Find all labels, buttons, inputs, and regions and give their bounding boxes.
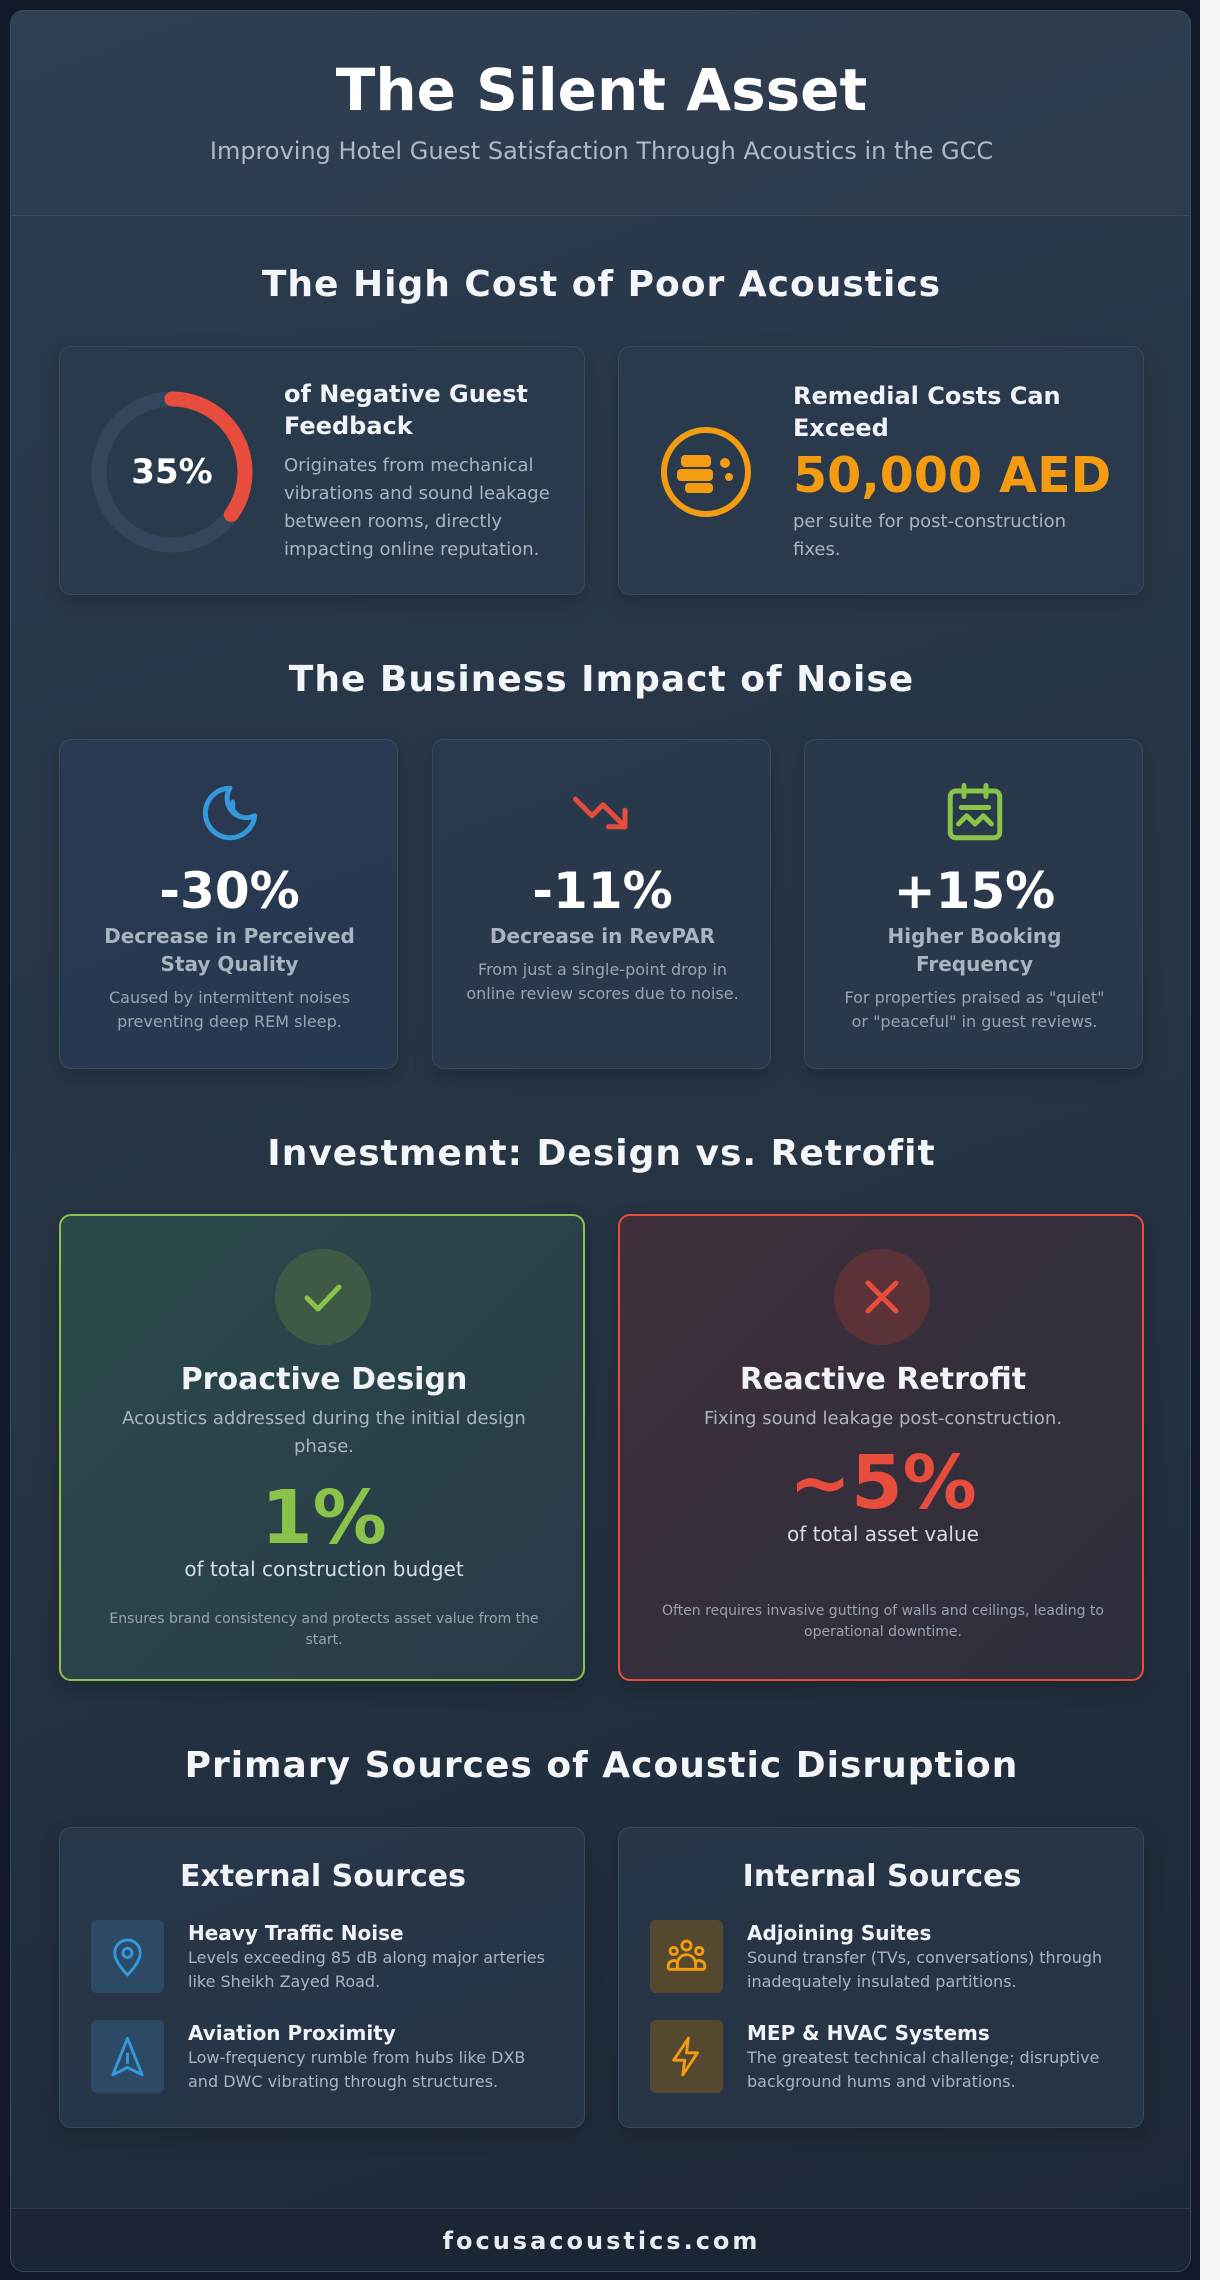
item: heavy traffic: Levels exceeding 85 dB along major arteries like Sheikh Zayed Road. (188, 1948, 545, 1991)
text: Remedial Costs Can Exceed (793, 382, 1061, 442)
title: The Silent Asset (336, 56, 867, 124)
card: booking frequency: Frequency (916, 952, 1033, 976)
card: proactive design: Ensures brand consistency and protects asset value from the start. (109, 1611, 539, 1648)
card: perceived quality: -30% (159, 862, 300, 920)
card: booking frequency: +15% (894, 862, 1055, 920)
text: Originates from mechanical vibrations and sound leakage between rooms, directly impacting online reputation. (284, 455, 550, 560)
item: adjoining suites: Sound transfer (TVs, conversations) through inadequately insulated partitions. (747, 1948, 1102, 1991)
text: per suite for post-construction fixes. (793, 511, 1066, 560)
card: external sources (59, 1827, 585, 2128)
card: booking frequency: For properties praised as "quiet" (844, 988, 1105, 1007)
item: adjoining suites: Adjoining Suites (747, 1921, 931, 1945)
card: perceived quality (59, 739, 398, 1069)
subtitle: Improving Hotel Guest Satisfaction Through Acoustics in the GCC (210, 137, 993, 165)
footer (11, 2208, 1192, 2273)
card title: Internal Sources (743, 1859, 1021, 1894)
item: heavy traffic: Heavy Traffic Noise (188, 1921, 404, 1945)
item: mep hvac: MEP & HVAC Systems (747, 2021, 990, 2045)
card: revpar: Decrease in RevPAR (490, 924, 715, 948)
icon: navigation (91, 2020, 164, 2093)
card: perceived quality: Decrease in Perceived (104, 924, 355, 948)
icon: calendar (948, 783, 1002, 840)
heading: investment: Investment: Design vs. Retrofit (267, 1133, 936, 1174)
card: booking frequency: or "peaceful" in guest reviews. (852, 1012, 1097, 1031)
icon: people (650, 1920, 723, 1993)
icon: cross (834, 1249, 930, 1345)
card: revpar: From just a single-point drop in (478, 960, 727, 979)
text: of Negative Guest Feedback (284, 380, 528, 440)
card: booking frequency: Higher Booking (888, 924, 1061, 948)
card: remedial costs (618, 346, 1144, 595)
icon: map pin (91, 1920, 164, 1993)
card title: External Sources (180, 1859, 466, 1894)
card: proactive design: 1% (261, 1475, 387, 1561)
card: reactive retrofit: ~5% (789, 1440, 977, 1526)
card: revpar: online review scores due to noise. (466, 984, 739, 1003)
item: heavy traffic (91, 1920, 545, 1993)
icon: check (275, 1249, 371, 1345)
text (284, 380, 550, 560)
card: proactive design: Acoustics addressed during the initial design phase. (122, 1408, 526, 1457)
card: reactive retrofit: Reactive Retrofit (740, 1362, 1026, 1397)
item: adjoining suites (650, 1920, 1102, 1993)
text: 50,000 AED (793, 447, 1111, 504)
icon: coin (661, 427, 751, 517)
card: reactive retrofit (618, 1214, 1144, 1681)
card: proactive design: Proactive Design (181, 1362, 467, 1397)
heading: primary sources: Primary Sources of Acoustic Disruption (185, 1745, 1018, 1786)
card: reactive retrofit: of total asset value (787, 1522, 979, 1546)
card: perceived quality: Caused by intermittent noises (109, 988, 350, 1007)
card: booking frequency (804, 739, 1143, 1069)
card: revpar (432, 739, 771, 1069)
text (793, 382, 1111, 560)
card: reactive retrofit: Often requires invasive gutting of walls and ceilings, leading to operational downtime. (662, 1603, 1104, 1640)
item: aviation: Aviation Proximity (188, 2021, 396, 2045)
item: mep hvac: The greatest technical challenge; disruptive background hums and vibrations. (747, 2048, 1099, 2091)
icon: moon (202, 786, 258, 840)
footer text: focusacoustics.com (443, 2227, 760, 2255)
donut chart (92, 392, 252, 552)
icon: trend down (573, 796, 628, 830)
card: proactive design: of total construction budget (184, 1557, 464, 1581)
card: internal sources (618, 1827, 1144, 2128)
card: revpar: -11% (532, 862, 673, 920)
card: reactive retrofit: Fixing sound leakage post-construction. (704, 1408, 1062, 1429)
item: aviation (91, 2020, 525, 2093)
item: aviation: Low-frequency rumble from hubs like DXB and DWC vibrating through structures. (188, 2048, 525, 2091)
header (11, 11, 1192, 216)
icon: lightning (650, 2020, 723, 2093)
item: mep hvac (650, 2020, 1099, 2093)
card: proactive design (59, 1214, 585, 1681)
heading: business impact: The Business Impact of Noise (289, 659, 914, 700)
heading: high cost: The High Cost of Poor Acoustics (262, 264, 941, 305)
card: negative feedback (59, 346, 585, 595)
card: perceived quality: preventing deep REM sleep. (117, 1012, 342, 1031)
donut chart: 35% (131, 452, 213, 492)
card: perceived quality: Stay Quality (161, 952, 298, 976)
